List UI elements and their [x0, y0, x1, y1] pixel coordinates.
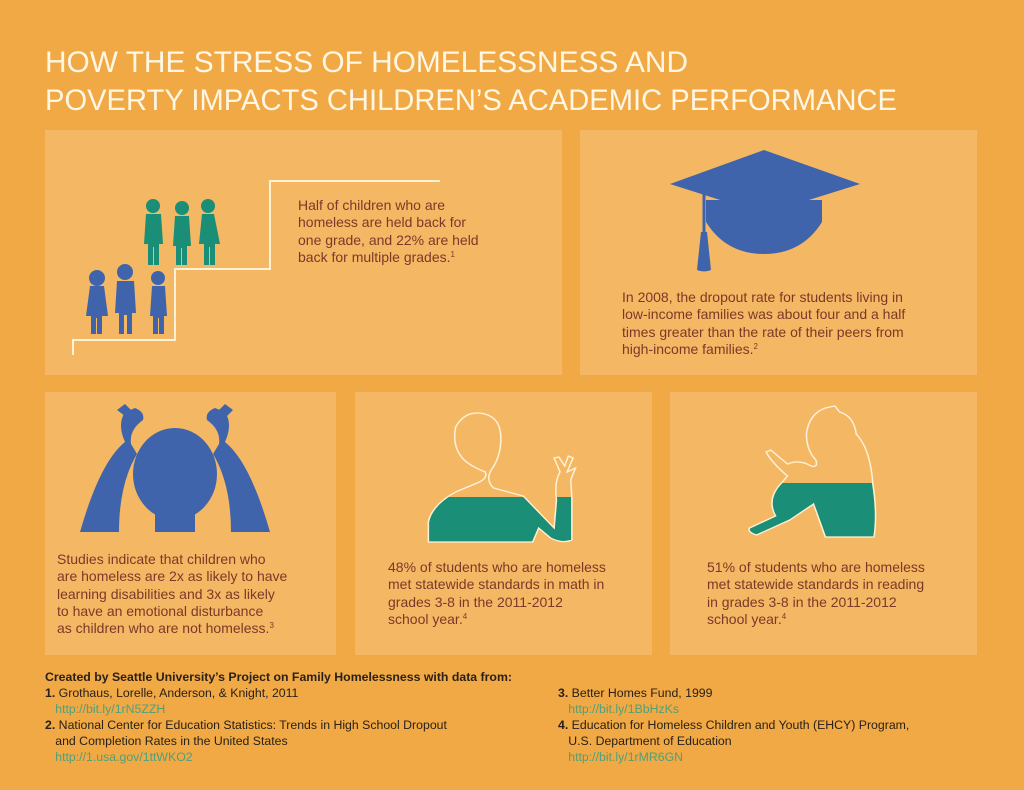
text: math stat: met statewide standards in math in [388, 576, 604, 592]
text: math stat: 48% of students who are homeless [388, 559, 606, 575]
icon: staircase with children [72, 180, 440, 355]
footer: sources left: Created by Seattle University’s Project on Family Homelessness with data from: [45, 670, 512, 684]
footer: sources right: 4. Education for Homeless Children and Youth (EHCY) Program, [558, 718, 909, 732]
icon: student outline reading [748, 405, 876, 538]
text: disabilities stat [57, 551, 287, 636]
text: dropout stat: In 2008, the dropout rate for students living in [622, 289, 903, 305]
text: disabilities stat: Studies indicate that children who [57, 551, 266, 567]
text: disabilities stat: are homeless are 2x as likely to have [57, 568, 287, 584]
footer: sources left: http://bit.ly/1rN5ZZH [55, 702, 165, 716]
text: held back stat: homeless are held back for [298, 214, 466, 230]
text: held back stat: back for multiple grades.1 [298, 249, 455, 265]
footer: sources right: http://bit.ly/1BbHzKs [568, 702, 679, 716]
text: held back stat: Half of children who are [298, 197, 445, 213]
panel: held back [45, 130, 562, 375]
text: math stat: grades 3-8 in the 2011-2012 [388, 594, 563, 610]
text: disabilities stat: as children who are not homeless.3 [57, 620, 274, 636]
text: dropout stat [622, 289, 906, 357]
panel: math [355, 392, 652, 655]
text: disabilities stat: to have an emotional disturbance [57, 603, 263, 619]
text: math stat: school year.4 [388, 611, 467, 627]
panel: learning disabilities [45, 392, 336, 655]
icon: graduation cap [670, 150, 860, 272]
footer: sources left: http://1.usa.gov/1ttWKO2 [55, 750, 193, 764]
text: held back stat [298, 197, 479, 265]
icon: student outline math [428, 412, 577, 543]
panel: dropout [580, 130, 977, 375]
footer: sources right: http://bit.ly/1rMR6GN [568, 750, 683, 764]
footer: sources left: and Completion Rates in the United States [55, 734, 288, 748]
footer: sources right [558, 686, 909, 764]
title: HOW THE STRESS OF HOMELESSNESS AND [45, 46, 688, 79]
text: reading stat: school year.4 [707, 611, 786, 627]
text: disabilities stat: learning disabilities and 3x as likely [57, 586, 275, 602]
panel: reading [670, 392, 977, 655]
text: reading stat: met statewide standards in reading [707, 576, 924, 592]
text: reading stat: in grades 3-8 in the 2011-2012 [707, 594, 897, 610]
footer: sources left: 1. Grothaus, Lorelle, Anderson, & Knight, 2011 [45, 686, 298, 700]
text: reading stat: 51% of students who are homeless [707, 559, 925, 575]
text: held back stat: one grade, and 22% are held [298, 232, 479, 248]
text: dropout stat: times greater than the rate of their peers from [622, 324, 904, 340]
title [45, 46, 897, 117]
text: dropout stat: low-income families was about four and a half [622, 306, 905, 322]
footer: sources left [45, 670, 512, 764]
text: reading stat [707, 559, 925, 627]
footer: sources right: U.S. Department of Education [568, 734, 732, 748]
icon: stressed child head [80, 404, 270, 532]
text: math stat [388, 559, 606, 627]
text: dropout stat: high-income families.2 [622, 341, 758, 357]
footer: sources left: 2. National Center for Education Statistics: Trends in High School Dropout [45, 718, 447, 732]
title: POVERTY IMPACTS CHILDREN’S ACADEMIC PERFORMANCE [45, 84, 897, 117]
footer: sources right: 3. Better Homes Fund, 1999 [558, 686, 712, 700]
